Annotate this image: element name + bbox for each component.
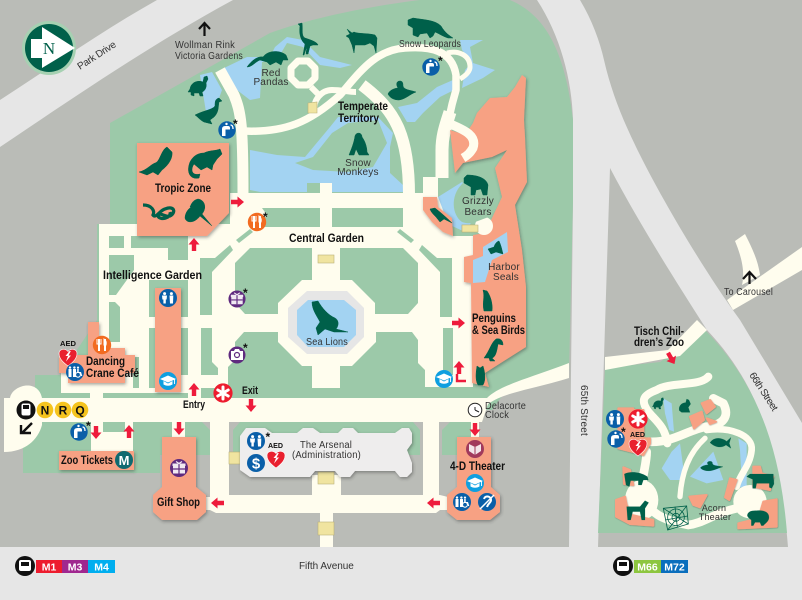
panel: The Arsenal	[240, 428, 412, 477]
icon: food cafe	[93, 336, 111, 354]
central path network	[99, 177, 473, 398]
label: Tisch Children's Zoo	[634, 324, 684, 349]
panel: Intelligence Garden building	[155, 288, 181, 392]
label: Penguins and Sea Birds	[472, 311, 525, 337]
icon: harbor seal	[488, 241, 503, 254]
garden blocks inside path network	[61, 208, 453, 432]
label: Snow Leopards: Snow Leopards	[399, 39, 461, 50]
label: Zoo Tickets: Zoo Tickets	[61, 453, 113, 467]
icon: accessible restrooms theater	[453, 493, 471, 511]
icon: heart children	[629, 439, 647, 456]
stairs	[229, 102, 478, 535]
panel: Gift Shop	[153, 437, 206, 520]
label: Dancing Crane Cafe: Crane Café	[86, 366, 139, 380]
panel: aviary	[423, 197, 453, 236]
icon: MetroCard: M	[119, 453, 129, 468]
icon: gift shop	[170, 459, 188, 477]
arrow: to carousel	[743, 272, 756, 284]
label: Snow Monkeys: Monkeys	[337, 167, 379, 178]
label: Temperate Territory: Temperate	[338, 99, 388, 113]
legend: buses M1 M3 M4: M4	[94, 562, 109, 574]
label: Wollman Rink Victoria Gardens: Wollman Rink	[175, 40, 236, 51]
garden island in the pond	[295, 120, 403, 193]
icon: restrooms arsenal	[247, 432, 265, 450]
panel: 4-D Theater	[447, 437, 500, 520]
Cafe group	[59, 336, 139, 381]
label: The Arsenal Administration: (Administration)	[292, 450, 361, 461]
icon: food north: *	[263, 210, 268, 224]
icon: education theater	[466, 474, 484, 492]
icon: gift center: *	[243, 286, 248, 300]
cream strokes: temperate territory paths	[220, 48, 470, 195]
icon: north compass	[22, 21, 76, 75]
label: AED arsenal: AED	[268, 443, 283, 450]
icon: bat	[139, 147, 172, 175]
grizzly enclosure island	[460, 176, 501, 227]
icon: food north	[248, 210, 268, 231]
buildings	[59, 75, 527, 520]
icons: subway lines: N	[41, 404, 49, 418]
icon: turtle	[188, 76, 208, 96]
label: Tisch Children's Zoo: Tisch Chil-	[634, 324, 684, 338]
icon: duck	[388, 81, 416, 100]
legend: buses M1 M3 M4: M3	[68, 562, 82, 574]
panel: Sea Lions octagon	[288, 291, 364, 354]
icon: crane	[298, 23, 318, 55]
legend: buses M1 M3 M4	[15, 556, 115, 576]
children's zoo road segments	[605, 320, 707, 370]
Children's zoo icons	[606, 409, 648, 456]
label: Snow Monkeys: Snow	[345, 158, 371, 169]
panel: Penguins and Bears exhibit	[450, 75, 527, 387]
icon: kinkajou	[188, 149, 222, 178]
legend: buses M66 M72: M66	[637, 562, 658, 574]
label: Acorn Theater: Theater	[699, 512, 731, 522]
icon: owl	[476, 366, 485, 385]
label: Red Pandas	[253, 68, 289, 88]
children's zoo paths and ponds	[616, 377, 777, 530]
icon: snake	[143, 205, 174, 219]
icon: asterisk children: *	[621, 425, 626, 439]
label: Intelligence Garden: Intelligence Garden	[103, 268, 202, 282]
icon: songbird	[430, 208, 452, 223]
label: Temperate Territory: Territory	[338, 111, 379, 125]
label: Dancing Crane Cafe: Dancing	[86, 354, 125, 368]
icon: camera	[228, 341, 248, 364]
label: The Arsenal Administration	[292, 440, 361, 461]
icon: hearing assistance	[478, 493, 496, 511]
icons: subway lines: Q	[75, 404, 85, 418]
paths	[4, 177, 802, 547]
legend: buses M1 M3 M4: M1	[42, 562, 56, 574]
Tropic Zone contents	[139, 147, 222, 226]
icon: first aid star	[213, 383, 233, 403]
Theater contents	[450, 440, 505, 511]
label: Wollman Rink Victoria Gardens	[175, 40, 243, 62]
icon: drinking fountain west gate	[70, 419, 91, 441]
icon: grizzly bear	[464, 175, 488, 195]
label: 65th Street: 65th Street	[578, 385, 589, 436]
icon: education penguins	[435, 370, 453, 388]
label: Acorn Theater	[699, 503, 731, 522]
icon: clock	[468, 403, 482, 417]
label: The Arsenal Administration: The Arsenal	[300, 440, 352, 451]
icon: north compass: N	[43, 39, 55, 58]
icon: snow leopard	[408, 18, 453, 38]
water: ponds and streams	[200, 37, 495, 232]
arrow: to Wollman Rink	[199, 23, 210, 36]
panel: Zoo Tickets	[59, 451, 134, 470]
icon: drinking fountain north: *	[438, 54, 443, 68]
label: Wollman Rink Victoria Gardens: Victoria Gardens	[175, 51, 243, 62]
label: 66th Street: 66th Street	[746, 371, 780, 414]
children's zoo animals	[624, 398, 774, 526]
label: Snow Monkeys	[337, 158, 379, 178]
road label: Park Drive: Park Drive	[76, 39, 119, 73]
label: Exit: Exit	[242, 385, 258, 397]
label: AED cafe: AED	[60, 341, 76, 348]
icon: parrot	[185, 199, 212, 226]
label: Central Garden: Central Garden	[289, 231, 364, 245]
path bay in bear exhibit	[446, 122, 474, 158]
icon: snow monkey	[349, 133, 369, 155]
label: Grizzly Bears	[462, 196, 494, 218]
icon: restrooms intelligence	[159, 289, 177, 307]
icon: heart cafe	[59, 349, 77, 366]
label: Red Pandas: Pandas	[253, 77, 289, 88]
icon: deer	[346, 29, 377, 53]
icon: drinking fountain north	[422, 54, 443, 76]
icon: drinking fountain west	[218, 117, 238, 139]
label: To Carousel: To Carousel	[724, 287, 773, 298]
label: Delacorte Clock: Delacorte	[485, 401, 526, 412]
Exhibit animals and labels	[430, 175, 525, 388]
icon: heart arsenal	[267, 451, 285, 468]
icon: accessible restrooms cafe	[66, 363, 84, 381]
cobweb	[663, 506, 688, 530]
label: Fifth Avenue: Fifth Avenue	[299, 561, 354, 572]
harbor seals pool	[473, 232, 508, 283]
legend: buses M66 M72	[613, 556, 688, 576]
icons: subway lines	[16, 400, 88, 420]
icon: fountain children	[607, 430, 625, 448]
icon: goose	[195, 98, 222, 124]
icon: restrooms children	[606, 410, 624, 428]
icon: drinking fountain west gate: *	[86, 419, 91, 433]
label: Harbor Seals: Harbor	[488, 262, 520, 273]
label: Acorn Theater: Acorn	[702, 503, 726, 513]
label: Grizzly Bears: Grizzly	[462, 196, 494, 207]
grizzly island and water edge	[454, 175, 498, 223]
icon: MetroCard	[115, 451, 133, 469]
icon: camera: *	[243, 341, 248, 355]
panel: Dancing Crane Cafe	[59, 322, 135, 383]
label: Penguins and Sea Birds: Penguins	[472, 311, 516, 325]
label: Harbor Seals: Seals	[493, 272, 519, 283]
icon: red panda	[247, 51, 288, 67]
label: Harbor Seals	[488, 262, 520, 283]
icon: theater	[466, 440, 484, 458]
label: Temperate Territory	[338, 99, 388, 125]
label: Tropic Zone: Tropic Zone	[155, 181, 211, 195]
Arsenal contents	[247, 430, 361, 472]
icon: dollar: $	[252, 456, 261, 472]
label: Dancing Crane Cafe	[86, 354, 139, 380]
label: AED children: AED	[630, 432, 645, 439]
icon: asterisk arsenal: *	[266, 430, 270, 444]
label: Tisch Children's Zoo: dren’s Zoo	[634, 335, 684, 349]
icon: star children	[628, 409, 648, 429]
label: Grizzly Bears: Bears	[464, 207, 492, 218]
gray block: west of 66th street	[598, 168, 788, 547]
icon: education intelligence	[159, 372, 177, 390]
icons: subway lines: R	[59, 404, 68, 418]
label: Entry: Entry	[183, 399, 206, 411]
road: Park Drive	[0, 0, 233, 147]
label: Penguins and Sea Birds: & Sea Birds	[472, 323, 525, 337]
icon: gift center	[228, 286, 248, 308]
arrows: red direction markers	[90, 196, 679, 508]
arrow: to subway	[21, 423, 32, 433]
legend: buses M66 M72: M72	[664, 562, 685, 574]
icon: drinking fountain west: *	[233, 117, 238, 131]
label: Delacorte Clock: Clock	[485, 410, 510, 421]
label: Gift Shop: Gift Shop	[157, 495, 200, 509]
icon: penguin	[483, 290, 492, 311]
panel: Sea Lions octagon: Sea Lions	[306, 337, 348, 348]
label: Red Pandas: Red	[262, 68, 280, 79]
label: 4-D Theater: 4-D Theater	[450, 459, 505, 473]
icon: puffin	[484, 339, 503, 361]
panel: Tropic Zone	[137, 143, 229, 236]
label: Delacorte Clock	[485, 401, 526, 421]
